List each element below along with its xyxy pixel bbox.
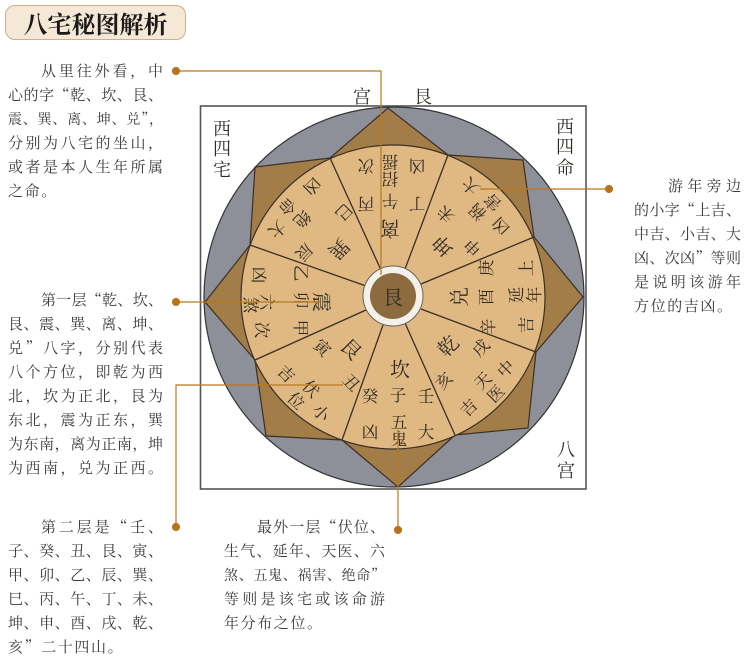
sector text: left (震): 凶 — [248, 267, 272, 283]
callout: small characters — [480, 186, 612, 192]
sector text: lower right (乾): 乾 — [430, 328, 464, 362]
sector text: left (震): 乙 — [290, 265, 314, 281]
sector text: left (震): 卯 — [290, 292, 314, 308]
text block: first layer: 艮、震、巽、离、坤、 — [8, 313, 163, 334]
text block: centre explanation: 震、巽、离、坤、兑”， — [8, 109, 163, 129]
text block: first layer: 北，坎为正北，艮为 — [8, 385, 163, 406]
sector text: right (兑): 兑 — [444, 287, 472, 307]
sector text: left (震): 次 — [251, 322, 275, 338]
frame labels: 八 — [557, 436, 575, 462]
text block: second layer: 子、癸、丑、艮、寅、 — [8, 540, 163, 561]
sector text: right (兑): 延 — [503, 287, 527, 303]
sector text: lower left (艮): 吉 — [273, 359, 301, 387]
sector text: lower left (艮): 寅 — [309, 333, 338, 362]
sector text: bottom (坎): 凶 — [362, 419, 378, 443]
callout: outermost layer — [394, 430, 402, 534]
text block: centre explanation: 心的字“乾、坎、艮、 — [8, 84, 163, 105]
sector text: lower right (乾): 吉 — [454, 393, 482, 421]
sector text: top (离): 招 — [382, 168, 398, 192]
sector text: upper left (巽): 命 — [273, 193, 302, 222]
frame labels: 宫 — [557, 457, 575, 483]
sector text: lower right (乾): 戌 — [466, 333, 494, 361]
sector text: bottom (坎): 大 — [418, 419, 435, 443]
sector text: upper right (坤): 坤 — [425, 230, 459, 264]
sector text: upper right (坤) — [425, 172, 514, 264]
text block: second layer: 第二层是“壬、 — [41, 516, 163, 537]
sector text: upper right (坤): 害 — [478, 189, 506, 217]
text block: first layer — [8, 289, 163, 478]
sector text: upper right (坤): 大 — [455, 172, 484, 201]
title: 八宅秘图解析 — [24, 5, 168, 40]
sector text: top (离): 离 — [380, 216, 400, 244]
text block: small characters: 中吉、小吉、大 — [634, 223, 741, 244]
sector text: top (离) — [358, 151, 425, 244]
text block: outermost layer — [224, 516, 385, 633]
sector text: left (震): 六 — [256, 294, 280, 311]
sector text: lower left (艮): 丑 — [338, 368, 366, 396]
tan sector disc — [241, 145, 545, 449]
sector text: upper left (巽): 巽 — [322, 233, 357, 268]
sector text: upper left (巽): 大 — [263, 216, 292, 245]
sector text: right (兑): 辛 — [475, 319, 499, 335]
text block: centre explanation: 之命。 — [8, 180, 58, 201]
frame labels — [213, 83, 575, 483]
outer grey circle — [204, 107, 584, 487]
sector text: upper right (坤): 祸 — [463, 199, 491, 227]
frame labels: 命 — [556, 154, 574, 180]
callout: first layer — [172, 298, 320, 306]
frame labels: 宫 — [353, 83, 371, 109]
text block: centre explanation: 从里往外看，中 — [41, 60, 163, 81]
frame labels: 四 — [213, 135, 231, 161]
text block: small characters: 是说明该游年 — [634, 271, 741, 292]
sector text: lower left (艮): 伏 — [298, 374, 326, 402]
text block: second layer: 亥”二十四山。 — [8, 636, 124, 657]
sector text: upper right (坤): 申 — [458, 234, 486, 262]
sector text: top (离): 次 — [358, 155, 374, 179]
sector text: right (兑): 年 — [521, 287, 545, 303]
text block: outermost layer: 煞、五鬼、祸害、绝命” — [224, 565, 385, 585]
text block: small characters: 的小字“上吉、 — [634, 199, 741, 220]
sector text: upper right (坤): 凶 — [486, 213, 514, 241]
sector text: top (离): 丁 — [409, 193, 425, 217]
sector text: right (兑): 酉 — [473, 289, 497, 305]
sector text: bottom (坎): 坎 — [390, 354, 410, 382]
sector text: top (离): 丙 — [358, 193, 374, 217]
sector text: lower left (艮): 位 — [283, 386, 311, 414]
sector text: top (离): 摇 — [382, 151, 398, 175]
text block: second layer — [8, 516, 163, 657]
text block: centre explanation: 或者是本人生年所属 — [8, 156, 163, 177]
sector text: right (兑): 上 — [513, 260, 537, 276]
sector text: upper left (巽): 凶 — [299, 173, 327, 201]
frame labels: 四 — [556, 133, 574, 159]
sector text: bottom (坎): 癸 — [362, 383, 379, 407]
centre emblem — [363, 266, 423, 326]
sector text: bottom (坎): 鬼 — [391, 426, 407, 450]
sector dividers — [250, 155, 536, 440]
text block: second layer: 坤、申、酉、戌、乾、 — [8, 612, 163, 633]
sector text: upper left (巽): 辰 — [291, 239, 319, 267]
text block: outermost layer: 最外一层“伏位、 — [257, 516, 385, 537]
text block: outermost layer: 年分布之位。 — [224, 612, 324, 633]
text block: first layer: 第一层“乾、坎、 — [41, 289, 163, 310]
text block: first layer: 为东南，离为正南，坤 — [8, 433, 163, 454]
sector text: upper right (坤): 未 — [431, 201, 459, 229]
text block: small characters: 方位的吉凶。 — [634, 295, 734, 316]
sector text: left (震) — [240, 265, 338, 338]
sector text: upper left (巽): 巳 — [331, 199, 359, 227]
sector text: right (兑): 庚 — [473, 260, 497, 276]
sector text: right (兑): 吉 — [513, 317, 537, 333]
sector text: lower left (艮): 艮 — [335, 331, 369, 365]
frame labels: 宅 — [213, 156, 231, 182]
text block: first layer: 为西南，兑为正西。 — [8, 457, 163, 478]
sector text: upper left (巽) — [263, 173, 359, 268]
text block: second layer: 甲、卯、乙、辰、巽、 — [8, 564, 163, 585]
text block: small characters — [634, 175, 741, 316]
sector text: lower left (艮): 小 — [308, 398, 337, 427]
sector text: top (离): 凶 — [409, 155, 425, 179]
callout: centre — [172, 68, 381, 275]
sector text: left (震): 震 — [308, 292, 338, 312]
text block: centre explanation — [8, 60, 163, 201]
text block: outermost layer: 等则是该宅或该命游 — [224, 588, 385, 609]
text block: small characters: 凶、次凶”等则 — [634, 247, 741, 268]
text block: outermost layer: 生气、延年、天医、六 — [224, 540, 385, 561]
text block: small characters: 游年旁边 — [668, 175, 741, 196]
frame labels: 西 — [213, 115, 231, 141]
sector text: bottom (坎) — [362, 354, 435, 450]
brown eight-pointed star — [205, 108, 583, 487]
sector text: bottom (坎): 壬 — [418, 383, 434, 407]
sector text: top (离): 午 — [382, 190, 398, 214]
centre emblem: 艮 — [383, 282, 403, 310]
text block: second layer: 巳、丙、午、丁、未、 — [8, 588, 163, 609]
text block: first layer: 八个方位，即乾为西 — [8, 361, 163, 382]
sector text: lower right (乾) — [429, 328, 519, 421]
sector text: upper left (巽): 绝 — [289, 206, 317, 234]
sector text: bottom (坎): 子 — [390, 382, 406, 406]
text block: first layer: 东北，震为正东，巽 — [8, 409, 163, 430]
sector text: lower right (乾): 医 — [481, 379, 509, 407]
square frame — [200, 106, 586, 489]
sector text: lower right (乾): 中 — [491, 354, 519, 382]
sector text: left (震): 甲 — [290, 320, 314, 336]
text block: centre explanation: 分别为八宅的坐山， — [8, 132, 163, 153]
frame labels: 艮 — [414, 83, 432, 109]
sector text: lower right (乾): 天 — [468, 366, 496, 394]
sector text: bottom (坎): 五 — [391, 409, 407, 433]
sector text: lower left (艮) — [273, 331, 369, 427]
text block: first layer: 兑”八字，分别代表 — [8, 337, 163, 358]
callout: second layer — [172, 385, 343, 530]
sector text: right (兑) — [444, 260, 545, 335]
sector text: left (震): 煞 — [240, 297, 264, 314]
sector text: lower right (乾): 亥 — [429, 366, 457, 394]
frame labels: 西 — [556, 113, 574, 139]
